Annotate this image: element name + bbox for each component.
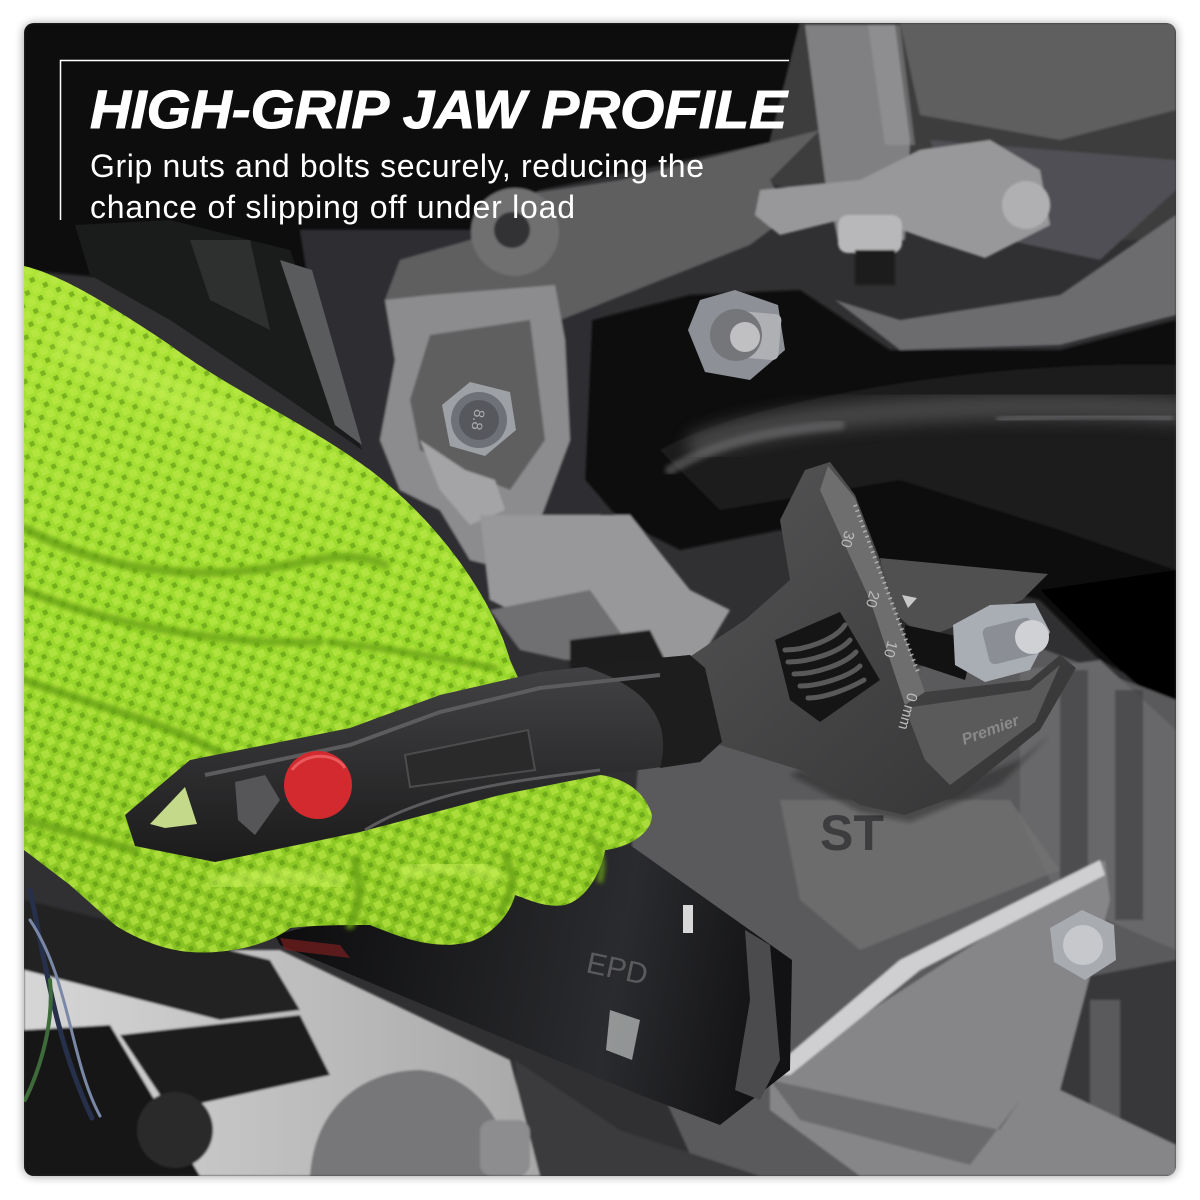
scale: 0 mm (894, 691, 921, 732)
lower metal (515, 1060, 760, 1176)
casting highlights (670, 406, 1176, 470)
wrench shadow on casting (791, 744, 1040, 824)
handle hang hole (150, 787, 197, 828)
wires (25, 890, 100, 1118)
oil filter (275, 845, 792, 1125)
bottom left floor (24, 950, 540, 1176)
photo: EPD (584, 947, 651, 992)
top dark area (24, 23, 800, 278)
silver block (480, 515, 730, 660)
title: HIGH-GRIP JAW PROFILE (90, 80, 789, 140)
casting bolt (688, 290, 785, 380)
black casting (585, 290, 1176, 700)
scale: 30 (837, 529, 858, 549)
scale (842, 531, 918, 729)
bolt in jaw (905, 603, 1050, 682)
hose top left (75, 220, 362, 450)
handle shield (235, 775, 280, 835)
wrench (125, 462, 1076, 862)
dark mid recess (300, 230, 600, 600)
bracket bolt (442, 382, 516, 456)
cast lettering: ST (820, 805, 884, 861)
right clamp (755, 140, 1050, 258)
upper arm silver bracket (385, 130, 820, 322)
bottom right casting (620, 640, 1176, 1176)
wrench handle (125, 655, 722, 862)
bracket bolt: 8.8 (467, 408, 488, 431)
description (90, 148, 704, 225)
description: Grip nuts and bolts securely, reducing the (90, 148, 704, 184)
glove (24, 266, 652, 953)
glove creases (24, 528, 602, 925)
description: chance of slipping off under load (90, 189, 575, 225)
moving jaw (880, 558, 1048, 638)
worm gear (775, 612, 880, 722)
top right metal background (760, 23, 1176, 240)
scale: 10 (880, 639, 901, 659)
scale: 20 (862, 589, 883, 609)
headline frame (60, 60, 789, 220)
red button (284, 751, 352, 819)
small hex bolt (1050, 910, 1116, 980)
wrench: Premier (960, 712, 1022, 749)
handle panel (405, 730, 535, 787)
wrench head (685, 462, 1076, 815)
vertical post (805, 25, 910, 250)
exhaust pipe (770, 860, 1176, 1176)
silver engine bracket (380, 285, 570, 570)
